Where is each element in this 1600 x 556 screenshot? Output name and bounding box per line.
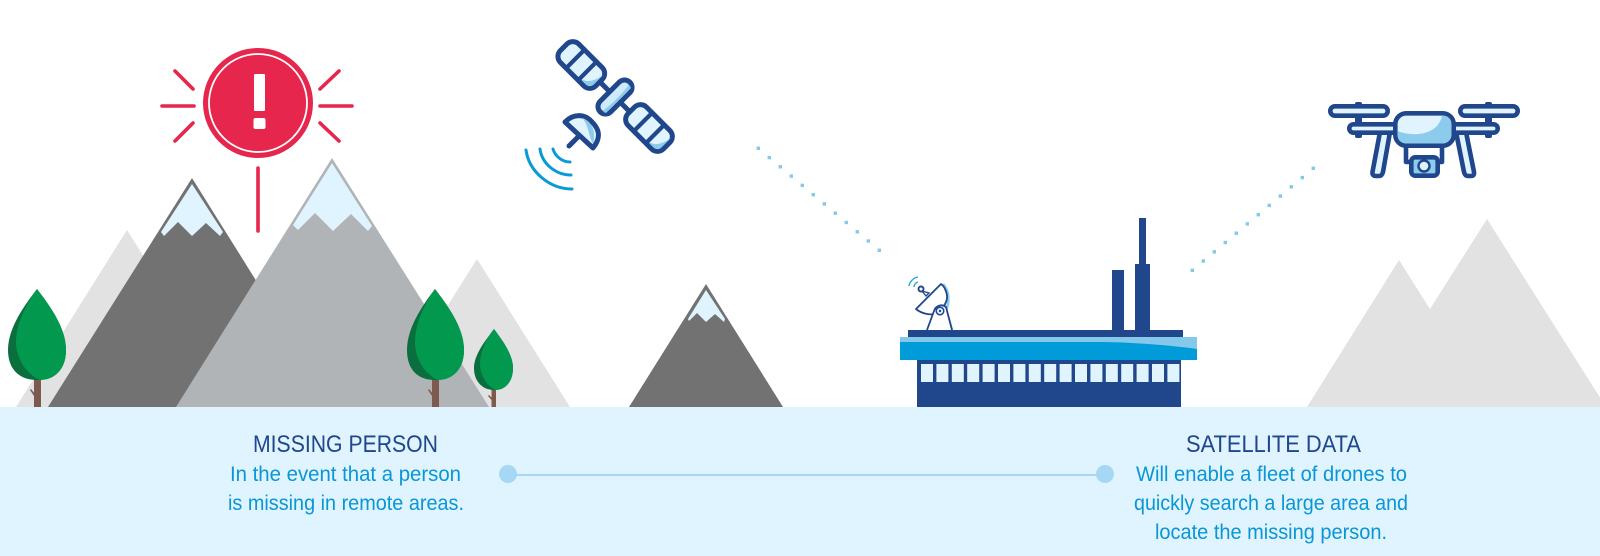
- connector line with end dots: [499, 465, 1114, 483]
- heading: satellite data: SATELLITE DATA: [1186, 431, 1362, 458]
- icon: drone: [1330, 102, 1518, 176]
- description: satellite data: quickly search a large area and: [1134, 492, 1408, 515]
- text block: satellite data: [1134, 431, 1408, 544]
- description: missing person: In the event that a person: [230, 463, 461, 486]
- building windows: [921, 364, 1179, 382]
- dark mountain with snow cap: [48, 178, 335, 407]
- drone camera mount: [1406, 146, 1442, 162]
- satellite body: [595, 77, 635, 117]
- heading: missing person: MISSING PERSON: [253, 431, 438, 458]
- tree left: [8, 289, 66, 407]
- description: satellite data: Will enable a fleet of drones to: [1136, 463, 1407, 486]
- satellite dish: [565, 116, 599, 148]
- satellite upper panel: [554, 38, 608, 92]
- grey mountain with snow cap: [176, 158, 489, 407]
- drone rotors: [1330, 102, 1518, 138]
- ground station: building: [900, 330, 1197, 407]
- middle mountain with snow cap: [629, 284, 783, 407]
- ground station: chimneys: [1112, 218, 1150, 331]
- icon: signal waves: [526, 149, 572, 189]
- drone arm: [1349, 124, 1498, 133]
- description: satellite data: locate the missing person.: [1155, 521, 1387, 544]
- ground band: [0, 407, 1600, 556]
- description: missing person: [228, 463, 464, 515]
- drone camera: [1411, 157, 1438, 176]
- drone body: [1395, 113, 1454, 146]
- satellite lower panel: [622, 101, 676, 155]
- description: satellite data: [1134, 463, 1408, 544]
- dotted line: station to drone: [1191, 167, 1315, 272]
- text block: missing person: [228, 431, 464, 515]
- ground station: satellite dish: [909, 277, 952, 330]
- dotted line: satellite to station: [757, 147, 881, 252]
- tree small: [474, 329, 513, 407]
- alert icon: exclamation circle with rays: [162, 48, 352, 231]
- drone legs: [1372, 132, 1474, 176]
- tree middle: [407, 289, 464, 407]
- icon: satellite: [554, 38, 676, 155]
- description: missing person: is missing in remote areas.: [228, 492, 464, 515]
- light mountains, right: [1307, 219, 1600, 407]
- light background mountains, left: [16, 230, 570, 407]
